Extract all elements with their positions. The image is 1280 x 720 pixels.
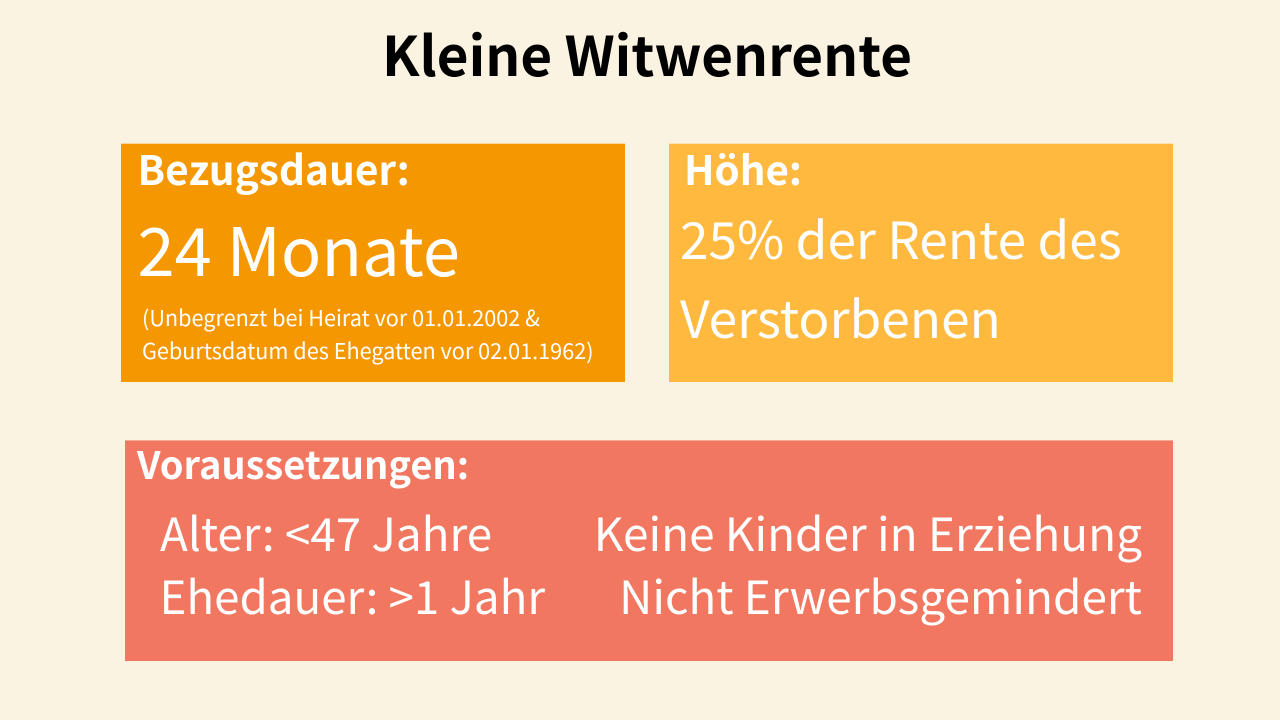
heading: Höhe: Höhe:	[684, 138, 802, 197]
requirement: no children: Keine Kinder in Erziehung	[594, 499, 1142, 565]
requirement: marriage duration: Ehedauer: >1 Jahr	[160, 562, 545, 628]
heading: Voraussetzungen: Voraussetzungen:	[137, 435, 469, 490]
panel: Bezugsdauer	[121, 144, 625, 382]
requirement: age: Alter: <47 Jahre	[160, 499, 492, 565]
requirement: not disabled: Nicht Erwerbsgemindert	[619, 562, 1142, 628]
heading: Bezugsdauer: Bezugsdauer:	[138, 138, 410, 197]
panel: Voraussetzungen	[125, 441, 1173, 661]
note line 2: Geburtsdatum des Ehegatten vor 02.01.1962)	[142, 335, 594, 366]
note line 1: (Unbegrenzt bei Heirat vor 01.01.2002 &	[142, 302, 540, 333]
amount line 2: Verstorbenen	[680, 278, 1001, 353]
duration value: 24 Monate	[138, 200, 460, 296]
amount line 1: 25% der Rente des	[680, 199, 1122, 274]
panel: Höhe	[669, 144, 1173, 382]
title: Kleine Witwenrente	[382, 12, 912, 92]
